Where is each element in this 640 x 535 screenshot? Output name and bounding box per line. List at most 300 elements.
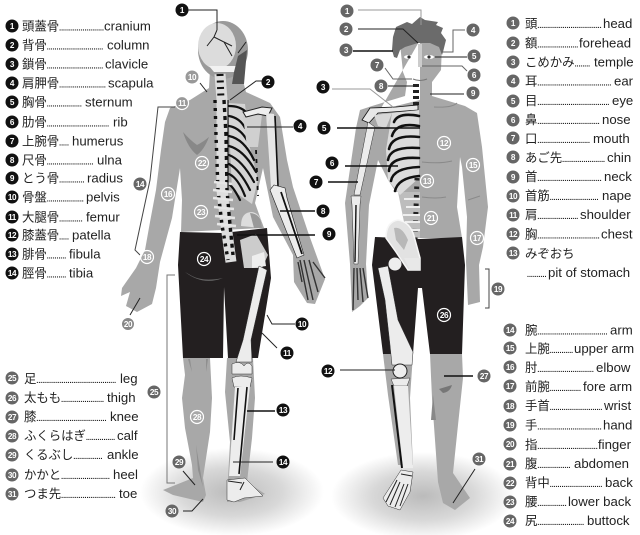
marker gray 8: 8 — [379, 82, 384, 91]
legend row neck: ................................. — [537, 176, 602, 183]
legend: arm and trunk — [504, 322, 634, 528]
legend row ankle — [6, 447, 139, 462]
back clavicle — [243, 107, 272, 117]
legend row thigh: ...................... — [61, 397, 104, 404]
marker ring 16 — [162, 188, 174, 200]
legend row shoulder: shoulder — [580, 207, 631, 222]
marker ring 17: 17 — [473, 234, 482, 243]
legend row clavicle: ............................. — [47, 64, 103, 70]
legend row toe: ............................ — [61, 493, 116, 500]
legend row upper arm: upper arm — [574, 341, 634, 356]
marker 10 — [296, 318, 308, 330]
left leg — [163, 358, 212, 502]
legend row fore arm: ................ — [550, 386, 581, 393]
legend row fore arm: 17 — [506, 382, 515, 391]
front humerus — [354, 122, 375, 195]
callout lines body parts — [130, 10, 489, 511]
marker gray 14 — [134, 178, 146, 190]
skull back — [198, 21, 248, 84]
marker ring 15: 15 — [469, 161, 478, 170]
legend row knee: 膝 — [24, 410, 37, 424]
marker gray 10 — [186, 70, 198, 84]
legend row rib: 6 — [10, 118, 15, 127]
legend row fibula: .......... — [47, 254, 66, 260]
legend row neck: 首 — [525, 170, 537, 184]
back forearm bones — [270, 185, 304, 258]
legend row pelvis — [6, 190, 120, 204]
legend row arm: .................................... — [537, 330, 607, 336]
legend row wrist: wrist — [603, 398, 631, 413]
back rib cage — [228, 103, 258, 204]
front pelvis — [386, 220, 420, 270]
legend row heel: ......................... — [61, 474, 110, 481]
legend row heel: heel — [113, 467, 138, 482]
legend row nape: 10 — [509, 192, 518, 201]
marker ring 28 — [190, 410, 204, 424]
legend row scapula: 4 — [10, 79, 15, 88]
legend row shoulder: 肩 — [525, 208, 537, 222]
legend row chest: chest — [601, 226, 633, 242]
legend row hand: 手 — [525, 418, 537, 432]
legend row heel: かかと — [24, 468, 61, 482]
floor shadow: front figure — [331, 452, 515, 535]
legend row buttock — [504, 513, 630, 528]
marker 12 — [322, 364, 334, 378]
legend row femur: 11 — [8, 213, 17, 222]
marker 5: 5 — [322, 124, 327, 133]
legend row patella: ..... — [59, 234, 69, 242]
legend row abdomen: 21 — [506, 460, 515, 469]
marker gray 6: 6 — [472, 71, 477, 80]
legend row forehead: ..................... — [537, 42, 578, 50]
legend row elbow: elbow — [596, 360, 631, 375]
legend row back: 背中 — [525, 475, 550, 490]
legend row radius: radius — [87, 170, 123, 186]
legend row mouth: ........................... — [537, 138, 590, 145]
legend row upper arm: 上腕 — [525, 342, 550, 356]
legend row clavicle: 3 — [10, 60, 15, 69]
front scapula — [374, 113, 392, 128]
legend row mouth: 口 — [525, 132, 537, 146]
legend row humerus — [6, 134, 124, 148]
legend row buttock: ........................ — [537, 520, 584, 527]
front skeleton — [351, 84, 420, 510]
legend row nose: 6 — [511, 116, 516, 125]
legend row knee: .................................... — [36, 416, 106, 423]
legend row temple: こめかみ — [525, 56, 575, 70]
legend row chin — [506, 150, 631, 165]
legend row neck: neck — [604, 169, 632, 184]
hair — [392, 17, 446, 58]
legend row forehead: forehead — [579, 36, 631, 50]
legend row elbow: 16 — [506, 363, 515, 372]
legend row humerus: humerus — [72, 134, 124, 148]
legend row scapula: scapula — [108, 76, 154, 90]
marker gray 20 — [122, 318, 134, 330]
legend row shoulder — [506, 207, 631, 222]
marker gray 5: 5 — [472, 52, 477, 61]
legend row thigh: thigh — [107, 390, 136, 405]
legend row ear: ear — [614, 74, 634, 88]
back shoulder shadow — [183, 132, 209, 155]
back spine — [213, 74, 236, 262]
legend row temple — [506, 54, 634, 70]
legend row back: 22 — [506, 479, 515, 488]
marker gray 10: 10 — [188, 73, 197, 82]
legend row sternum: 5 — [10, 98, 15, 107]
legend row nose: 鼻 — [525, 112, 537, 127]
marker gray 31: 31 — [475, 455, 484, 464]
marker 3 — [316, 80, 330, 94]
legend row buttock: buttock — [587, 513, 630, 528]
legend row cranium — [6, 18, 151, 34]
legend row cranium: ....................... — [59, 26, 104, 32]
marker ring 18: 18 — [143, 253, 152, 262]
marker gray 1 — [340, 4, 354, 18]
legend row radius: とう骨 — [22, 172, 59, 186]
legend row hand: hand — [603, 418, 632, 432]
legend row cranium: 1 — [10, 22, 15, 31]
legend row fibula — [6, 246, 101, 262]
legend row radius: ............. — [59, 178, 85, 184]
legend row rib: ................................ — [47, 122, 109, 128]
marker gray 30 — [166, 504, 178, 518]
legend row eye: 5 — [511, 97, 516, 106]
legend row leg: ......................................... — [36, 378, 116, 385]
marker gray 4: 4 — [471, 26, 476, 35]
legend row fibula: 腓骨 — [22, 246, 47, 262]
legend row thigh: 26 — [8, 394, 17, 403]
legend row pelvis: 骨盤 — [22, 190, 47, 204]
legend row lower back — [504, 494, 631, 509]
legend row clavicle — [6, 56, 148, 72]
marker gray 9 — [466, 86, 480, 100]
front fibula — [392, 385, 402, 468]
marker gray 1: 1 — [345, 7, 350, 16]
legend row patella: 12 — [8, 231, 17, 240]
legend row rib — [6, 114, 128, 130]
legend row calf — [6, 428, 138, 443]
legend row forehead: 2 — [511, 39, 516, 48]
marker ring 24: 24 — [200, 255, 209, 264]
legend row shoulder: 11 — [509, 211, 518, 220]
legend row finger: 指 — [525, 437, 537, 452]
right leg — [225, 358, 265, 502]
front forearm bones — [351, 196, 361, 264]
legend row pit of stomach: みぞおち — [525, 247, 575, 261]
legend row fore arm: fore arm — [583, 379, 632, 394]
marker 9 — [322, 228, 336, 240]
legend row eye: eye — [612, 93, 633, 108]
front clavicle and shoulder — [362, 105, 418, 123]
marker ring 23: 23 — [197, 208, 206, 217]
legend row buttock: 24 — [506, 517, 515, 526]
marker 6 — [326, 156, 338, 170]
marker 4: 4 — [298, 122, 303, 131]
legend row elbow: ............................. — [537, 367, 594, 374]
marker ring 18 — [140, 250, 154, 264]
legend row mouth — [506, 131, 630, 146]
front hand bones — [353, 268, 368, 310]
legend row pelvis: ................... — [47, 196, 84, 204]
legend row ankle: ankle — [107, 447, 139, 462]
front femur — [378, 266, 413, 365]
back scapula — [243, 115, 262, 147]
legend row upper arm: 15 — [506, 344, 515, 353]
marker 11 — [280, 346, 294, 360]
legend row back: ........................... — [550, 482, 602, 489]
legend row radius — [6, 170, 123, 186]
front patella — [393, 364, 407, 378]
marker ring 24 — [198, 252, 210, 266]
marker ring 21: 21 — [427, 214, 436, 223]
legend row ulna: ........................ — [47, 160, 94, 166]
legend row fibula: 13 — [8, 250, 17, 259]
legend row leg: leg — [120, 371, 138, 386]
legend row head — [506, 16, 632, 31]
legend row chin: ...................... — [562, 157, 605, 164]
chest creases — [422, 103, 480, 200]
marker 10: 10 — [298, 320, 307, 329]
legend row leg: 25 — [8, 374, 17, 383]
marker ring 15 — [466, 158, 480, 172]
marker 1 — [176, 4, 188, 16]
marker 4 — [294, 120, 306, 132]
legend row lower back: lower back — [568, 494, 631, 509]
legend row clavicle: 鎖骨 — [22, 58, 47, 72]
legend row tibia: 脛骨 — [22, 266, 47, 280]
calf shading — [188, 359, 208, 487]
legend row calf: 28 — [8, 432, 17, 441]
legend row eye: 目 — [525, 94, 537, 108]
legend row shoulder: ..................... — [537, 214, 578, 221]
legend row calf: ............... — [86, 435, 115, 442]
legend row forehead: 額 — [525, 36, 538, 50]
marker gray 7: 7 — [375, 61, 380, 70]
marker ring 13: 13 — [423, 177, 432, 186]
legend: lower body — [6, 371, 139, 501]
legend row arm: arm — [610, 322, 633, 338]
legend row eye — [506, 93, 633, 108]
marker ring 26 — [438, 308, 450, 322]
legend row femur: ............ — [59, 216, 83, 224]
marker gray 25: 25 — [150, 388, 159, 397]
legend row upper arm — [504, 341, 634, 356]
front foot bones — [383, 470, 413, 510]
marker 13 — [276, 404, 290, 416]
back hand bones — [298, 260, 325, 300]
marker gray 25 — [148, 386, 160, 398]
legend row nape: nape — [602, 188, 631, 203]
legend row knee: 27 — [8, 413, 17, 422]
legend row chest: 12 — [509, 230, 518, 239]
legend row chest: ................................ — [537, 234, 600, 240]
legend row column: ............................. — [47, 44, 103, 52]
legend row temple: temple — [594, 54, 634, 70]
legend row patella: 膝蓋骨 — [22, 228, 59, 242]
legend row ulna: ulna — [97, 152, 123, 168]
legend row ear: 耳 — [525, 74, 537, 88]
marker 7: 7 — [314, 178, 319, 187]
legend row nose: nose — [602, 112, 631, 127]
legend row patella — [6, 228, 112, 242]
legend row femur — [6, 210, 120, 224]
marker 7 — [310, 176, 322, 188]
back body silhouette — [121, 70, 325, 312]
legend row toe: つま先 — [24, 487, 61, 501]
back view figure — [121, 21, 325, 502]
legend row lower back: ............... — [537, 501, 567, 508]
marker gray 9: 9 — [471, 89, 476, 98]
callouts: body parts — [122, 4, 504, 518]
legend row ear — [506, 74, 634, 88]
legend row knee — [6, 409, 139, 424]
front neck vertebrae — [413, 84, 419, 108]
back femur — [236, 266, 267, 362]
callouts: bones — [176, 4, 420, 468]
marker ring 28: 28 — [193, 413, 202, 422]
eyes — [404, 55, 434, 59]
legend row lower back: 23 — [506, 498, 515, 507]
marker 11: 11 — [283, 349, 292, 358]
legend row humerus: 上腕骨 — [22, 134, 59, 148]
legend row wrist: ........................... — [550, 405, 602, 412]
legend row leg: 足 — [24, 372, 36, 386]
nose highlight — [418, 44, 422, 67]
legend row abdomen: 腹 — [525, 457, 538, 471]
legend row ulna — [6, 152, 123, 168]
legend row mouth: 7 — [511, 134, 516, 143]
marker gray 8 — [374, 80, 388, 92]
legend row sternum — [6, 94, 133, 110]
legend row leg — [6, 371, 138, 386]
legend row thigh — [6, 390, 136, 405]
marker 5 — [318, 122, 330, 134]
legend row wrist: 手首 — [525, 399, 550, 413]
legend row nape: 首筋 — [525, 188, 550, 203]
legend row chest: 胸 — [525, 226, 537, 242]
marker ring 12: 12 — [440, 139, 449, 148]
legend row head: ................................. — [537, 23, 602, 30]
callout lines bones — [188, 10, 420, 462]
marker ring 12 — [438, 136, 450, 150]
legend row toe: toe — [119, 486, 137, 501]
legend row sternum: 胸骨 — [22, 94, 47, 110]
marker gray 20: 20 — [124, 320, 133, 329]
legend row ankle: くるぶし — [24, 448, 73, 462]
marker ring 23 — [194, 206, 208, 218]
legend row upper arm: ............ — [550, 348, 573, 355]
marker 2: 2 — [266, 78, 271, 87]
legend row thigh: 太もも — [24, 390, 61, 405]
legend row tibia — [6, 266, 94, 280]
marker gray 2: 2 — [344, 25, 349, 34]
legend row sternum: .................. — [47, 102, 82, 108]
marker 8 — [316, 204, 330, 218]
legend row pelvis: pelvis — [86, 190, 120, 204]
legend row head: 1 — [511, 19, 516, 28]
front tibia — [394, 386, 413, 468]
legend row nape: ......................... — [550, 195, 598, 202]
legend: head and torso — [506, 16, 634, 280]
marker ring 26: 26 — [440, 311, 449, 320]
marker gray 14: 14 — [136, 180, 145, 189]
legend row toe — [6, 486, 137, 501]
legend row abdomen — [504, 456, 629, 471]
legend row chin: あご先 — [525, 150, 562, 165]
marker gray 30: 30 — [168, 507, 177, 516]
legend row elbow — [504, 360, 631, 375]
front right leg — [430, 354, 470, 510]
front spine — [403, 178, 420, 240]
marker 14 — [276, 456, 290, 468]
legend row tibia: 14 — [8, 269, 17, 278]
legend row hand: ................................. — [537, 424, 602, 432]
legend row temple: 3 — [511, 58, 516, 67]
marker gray 3: 3 — [344, 46, 349, 55]
back skeleton — [198, 21, 325, 502]
legend row column: 背骨 — [22, 38, 47, 52]
marker gray 7 — [370, 58, 384, 72]
marker ring 16: 16 — [164, 190, 173, 199]
front view figure — [345, 17, 488, 510]
marker ring 22 — [196, 156, 208, 170]
legend row toe: 31 — [8, 490, 17, 499]
legend row chest — [506, 226, 633, 242]
legend row abdomen: abdomen — [574, 456, 629, 471]
legend row arm: 14 — [506, 326, 515, 335]
torso left strip — [398, 192, 420, 238]
legend row temple: ........ — [575, 62, 590, 68]
legend row eye: ..................................... — [537, 100, 609, 107]
marker 2 — [262, 76, 274, 88]
marker gray 2 — [340, 22, 352, 36]
legend row patella: patella — [72, 228, 112, 242]
legend row finger: 20 — [506, 440, 515, 449]
legend row mouth: mouth — [593, 131, 630, 146]
marker ring 17 — [470, 232, 484, 244]
legend row column: column — [107, 38, 150, 52]
legend row column: 2 — [10, 41, 15, 50]
legend row wrist: 18 — [506, 402, 515, 411]
knee shading — [439, 385, 452, 393]
legend row forehead — [506, 36, 631, 50]
front left leg — [383, 354, 413, 465]
legend row elbow: 肘 — [525, 360, 537, 375]
legend row nape — [506, 188, 631, 203]
legend row head: 頭 — [525, 17, 538, 31]
legend row pit of stomach: pit of stomach — [548, 265, 630, 280]
marker ring 22: 22 — [198, 159, 207, 168]
marker gray 3 — [340, 44, 352, 56]
legend row lower back: 腰 — [525, 495, 537, 509]
marker gray 29: 29 — [175, 458, 184, 467]
marker 3: 3 — [321, 83, 326, 92]
legend row hand: 19 — [506, 421, 515, 430]
legend row radius: 9 — [10, 174, 15, 183]
front knee head — [391, 378, 410, 386]
legend row scapula — [6, 76, 154, 90]
marker ring 13 — [420, 174, 434, 188]
legend row neck — [506, 169, 632, 184]
legend row ear: ...................................... — [537, 80, 611, 88]
legend row cranium: 頭蓋骨 — [22, 20, 59, 34]
front body silhouette left half — [345, 40, 420, 312]
front shorts — [372, 237, 465, 354]
legend row calf: ふくらはぎ — [24, 429, 86, 443]
legend row finger — [504, 437, 632, 452]
legend row arm: 腕 — [525, 324, 537, 338]
